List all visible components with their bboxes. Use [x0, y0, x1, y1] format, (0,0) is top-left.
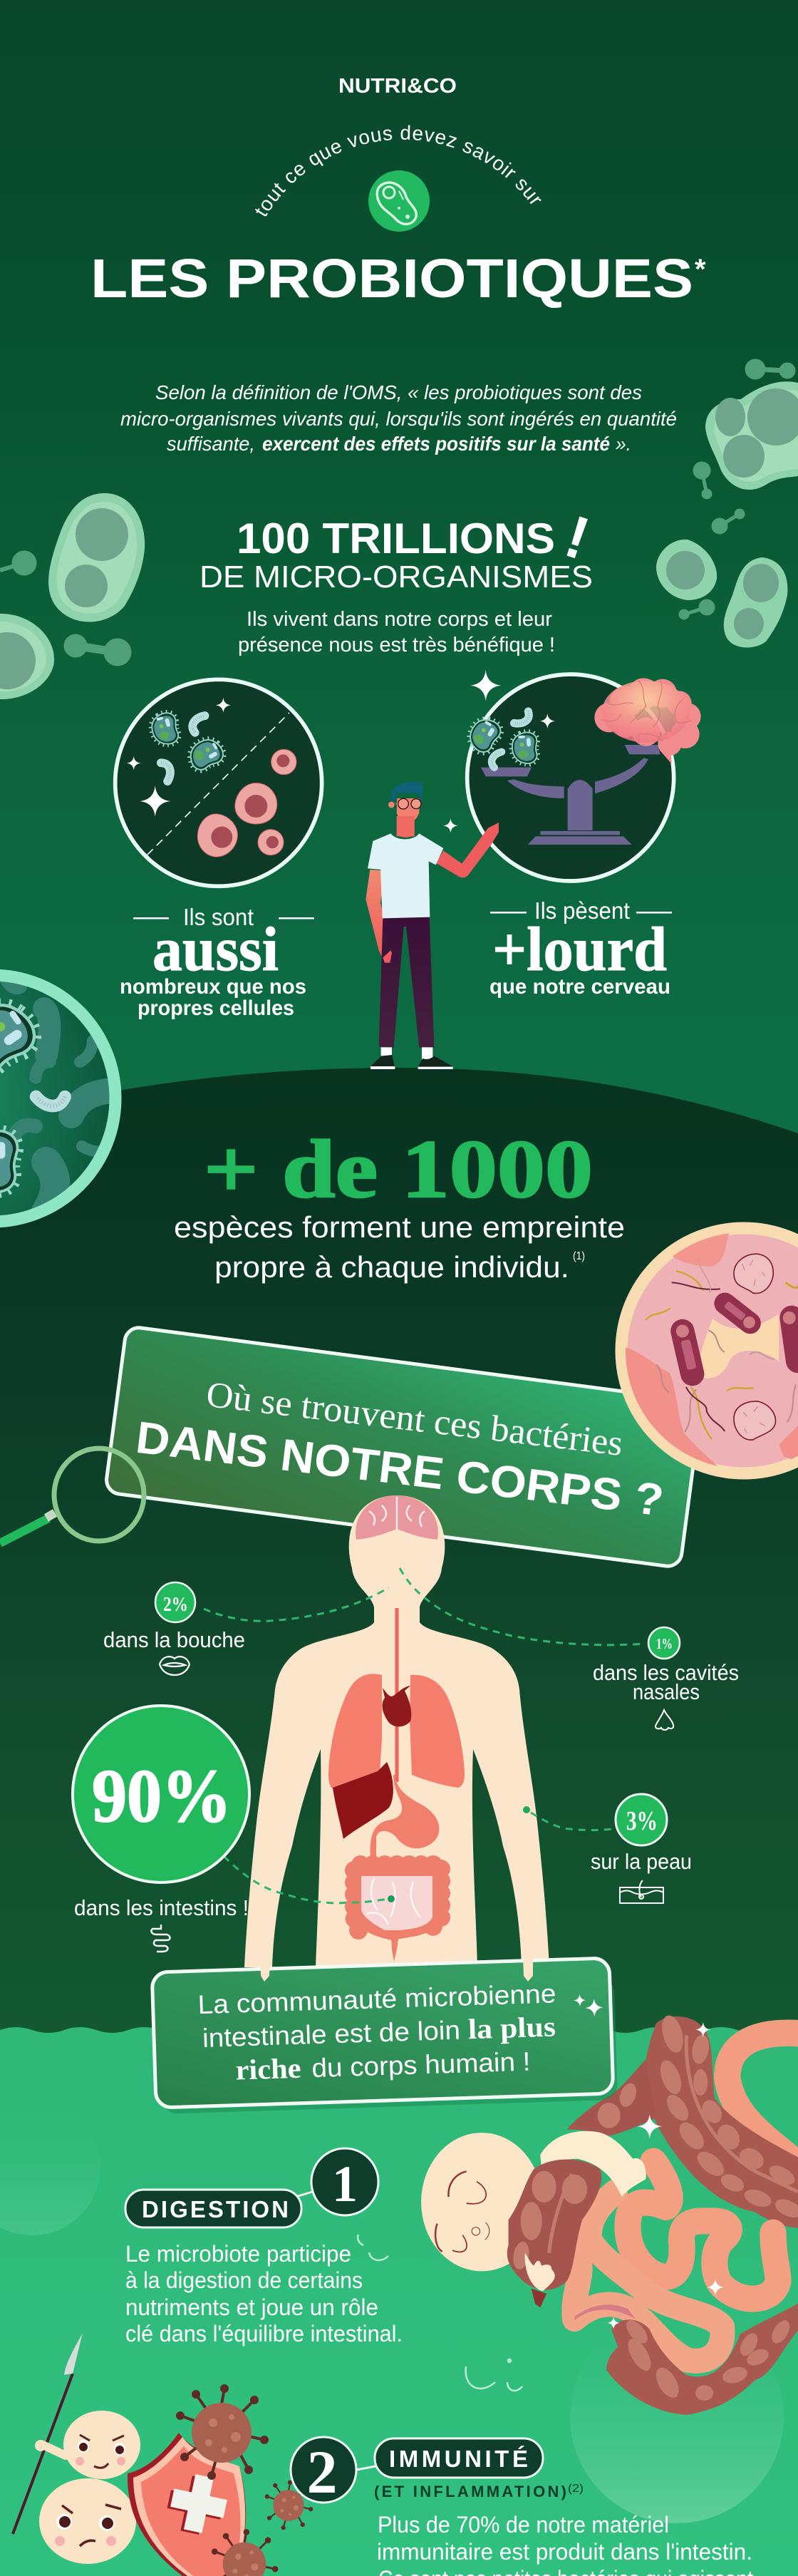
decorative bubbles: [358, 2235, 522, 2391]
esophagus: [395, 1608, 399, 1782]
panel: intestines illustration: [421, 2013, 798, 2415]
section heading: immunity: (ET INFLAMMATION): [374, 2483, 566, 2500]
text: digestion paragraph: nutriments et joue un rôle: [125, 2294, 378, 2320]
stat: 1% nose: [593, 1627, 739, 1730]
connector: skin: [523, 1806, 613, 1830]
logo: NUTRI&CO: [338, 75, 457, 98]
sign text: la plus: [467, 2010, 556, 2045]
intro paragraph: exercent des effets positifs sur la santé: [262, 433, 610, 455]
text: benefit sentence: [238, 608, 555, 656]
decorative microbes left: [0, 493, 145, 699]
stat: + de 1000: + de 1000: [204, 1124, 593, 1215]
background: light green scalloped section: [0, 2027, 798, 2576]
upper colon: [643, 2016, 798, 2228]
text: digestion paragraph: clé dans l'équilibre intestinal.: [125, 2321, 403, 2346]
sign heading: Où se trouvent ces bactéries: [204, 1375, 625, 1464]
text: Ils pèsent + lourd: que notre cerveau: [489, 975, 670, 999]
background bubble lower right: [570, 2309, 784, 2523]
intro paragraph: micro-organismes vivants qui, lorsqu'ils sont ingérés en quantité: [120, 408, 677, 430]
text: benefit sentence: Ils vivent dans notre corps et leur: [247, 608, 552, 631]
liver: [333, 1762, 393, 1839]
text: Ils sont aussi nombreux: nombreux que nos: [120, 975, 306, 999]
icon: bacterium badge: [368, 170, 430, 232]
panel: bacteria vs cells circle: [115, 679, 322, 886]
text: Ils sont aussi nombreux: propres cellules: [138, 996, 294, 1020]
sign text: [197, 1979, 559, 2087]
body silhouette: [244, 1495, 549, 1967]
small intestine: [572, 2161, 778, 2361]
stat: 90% intestines: 90%: [92, 1754, 232, 1838]
panel: microbial community sign: [152, 1958, 618, 2114]
glasses: [398, 798, 421, 809]
section heading: digestion: [125, 2148, 378, 2227]
hands holding sign: [260, 1957, 533, 1982]
title: *: [695, 254, 706, 285]
stat: 90% intestines: [73, 1706, 249, 1952]
intro paragraph: ».: [616, 433, 631, 455]
brain in head: [356, 1495, 438, 1540]
decorative microbes top right: [693, 359, 798, 499]
spear: [13, 2333, 83, 2534]
virus small: [266, 2481, 312, 2529]
text: Ils sont aussi nombreux: [120, 904, 314, 1020]
sign text: intestinale est de loin: [202, 2016, 461, 2053]
text: digestion paragraph: [125, 2241, 403, 2346]
text: espèces: propre à chaque individu.: [214, 1250, 569, 1284]
icon: magnifier: [0, 1448, 144, 1543]
text: Ils sont aussi nombreux: Ils sont: [183, 904, 254, 930]
section heading: immunity: (2): [568, 2483, 584, 2495]
headline: 100 trillions: [200, 503, 597, 594]
icon: skin: [620, 1880, 663, 1903]
stat: 1% nose: dans les cavités: [593, 1660, 739, 1685]
character head and arm: [421, 2131, 646, 2271]
text: immunity paragraph: [377, 2512, 753, 2576]
text: espèces: (1): [573, 1250, 585, 1262]
lungs: [328, 1674, 465, 1789]
section heading: immunity: [291, 2437, 584, 2506]
hair: [390, 782, 423, 802]
connector: intestine: [224, 1856, 395, 1903]
icon: lips: [160, 1657, 190, 1675]
title: LES PROBIOTIQUES: [90, 248, 693, 309]
sign text: riche: [235, 2052, 301, 2086]
stat: 3% skin: [591, 1794, 692, 1903]
text: Ils pèsent + lourd: Ils pèsent: [534, 897, 630, 924]
text: Ils pèsent + lourd: [489, 897, 672, 999]
hugged colon segment: [507, 2159, 601, 2290]
intestines: [350, 1862, 445, 1962]
text: espèces: espèces forment une empreinte: [174, 1210, 625, 1244]
stat: 1% nose: nasales: [633, 1679, 700, 1704]
section heading: immunity: IMMUNITÉ: [389, 2446, 528, 2472]
intro paragraph: Selon la définition de l'OMS, « les probiotiques sont des: [155, 381, 642, 403]
connector: mouth: [204, 1587, 389, 1621]
section heading: digestion: DIGESTION: [142, 2196, 289, 2222]
headline: 100 trillions: DE MICRO-ORGANISMES: [200, 560, 593, 594]
stat: 2% mouth: 2%: [163, 1594, 188, 1616]
sign text: La communauté microbienne: [197, 1979, 556, 2019]
connector: nose: [400, 1568, 646, 1645]
background: top green section: [0, 0, 798, 1140]
headline: 100 trillions: !: [557, 503, 597, 572]
icon: brain: [594, 678, 701, 764]
panel: immune warriors: [13, 2333, 312, 2576]
icon: nose: [656, 1710, 673, 1730]
character top: [35, 2411, 140, 2479]
intro paragraph: suffisante,: [167, 433, 255, 455]
character bottom: [39, 2478, 136, 2564]
stomach: [370, 1775, 439, 1860]
stat: 3% skin: 3%: [626, 1806, 658, 1836]
text: Ils pèsent + lourd: +lourd: [492, 915, 667, 984]
sign text: du corps humain !: [311, 2047, 531, 2083]
stat: 3% skin: sur la peau: [591, 1849, 692, 1874]
text: espèces: [174, 1210, 625, 1284]
heart: [383, 1686, 411, 1726]
panel: human body: [244, 1495, 549, 1967]
background bubble lower left: [0, 2098, 100, 2235]
text: Ils sont aussi nombreux: aussi: [152, 915, 279, 984]
virus bottom: [212, 2530, 277, 2576]
headline: 100 trillions: 100 TRILLIONS: [237, 515, 555, 562]
panel: balance circle: [465, 670, 701, 881]
text: immunity paragraph: immunitaire est produit dans l'intestin.: [377, 2539, 752, 2565]
virus big: [177, 2386, 267, 2478]
text: immunity paragraph: Plus de 70% de notre matériel: [378, 2512, 669, 2538]
stat: 2% mouth: dans la bouche: [103, 1627, 245, 1652]
background: dark hill section: [0, 1068, 798, 2067]
text: benefit sentence: présence nous est très bénéfique !: [238, 634, 555, 656]
panel: microscope view left: [0, 969, 118, 1222]
panel: sign where bacteria: DANS NOTRE CORPS ?: [133, 1413, 666, 1526]
upper loop tube: [727, 2033, 798, 2171]
icon: shield: [128, 2433, 246, 2576]
stat: 90% intestines: dans les intestins !: [74, 1895, 249, 1920]
lower colon: [606, 2299, 798, 2415]
panel: person: [366, 782, 499, 1069]
arched subtitle: tout ce que vous devez savoir sur: [255, 125, 542, 217]
icon: intestine: [151, 1925, 170, 1952]
text: digestion paragraph: à la digestion de certains: [125, 2267, 363, 2293]
stat: 2% mouth: [103, 1582, 245, 1675]
section heading: immunity: 2: [306, 2438, 338, 2506]
text: digestion paragraph: Le microbiote participe: [125, 2241, 351, 2267]
decorative microbes right of headline: [656, 509, 787, 647]
section heading: digestion: 1: [332, 2155, 358, 2212]
stat: 1% nose: 1%: [656, 1635, 673, 1652]
panel: sign where bacteria: [105, 1326, 702, 1568]
intro paragraph: [120, 381, 677, 455]
icon: scale: [481, 745, 660, 845]
panel: pink bacteria circle: [621, 1228, 798, 1473]
